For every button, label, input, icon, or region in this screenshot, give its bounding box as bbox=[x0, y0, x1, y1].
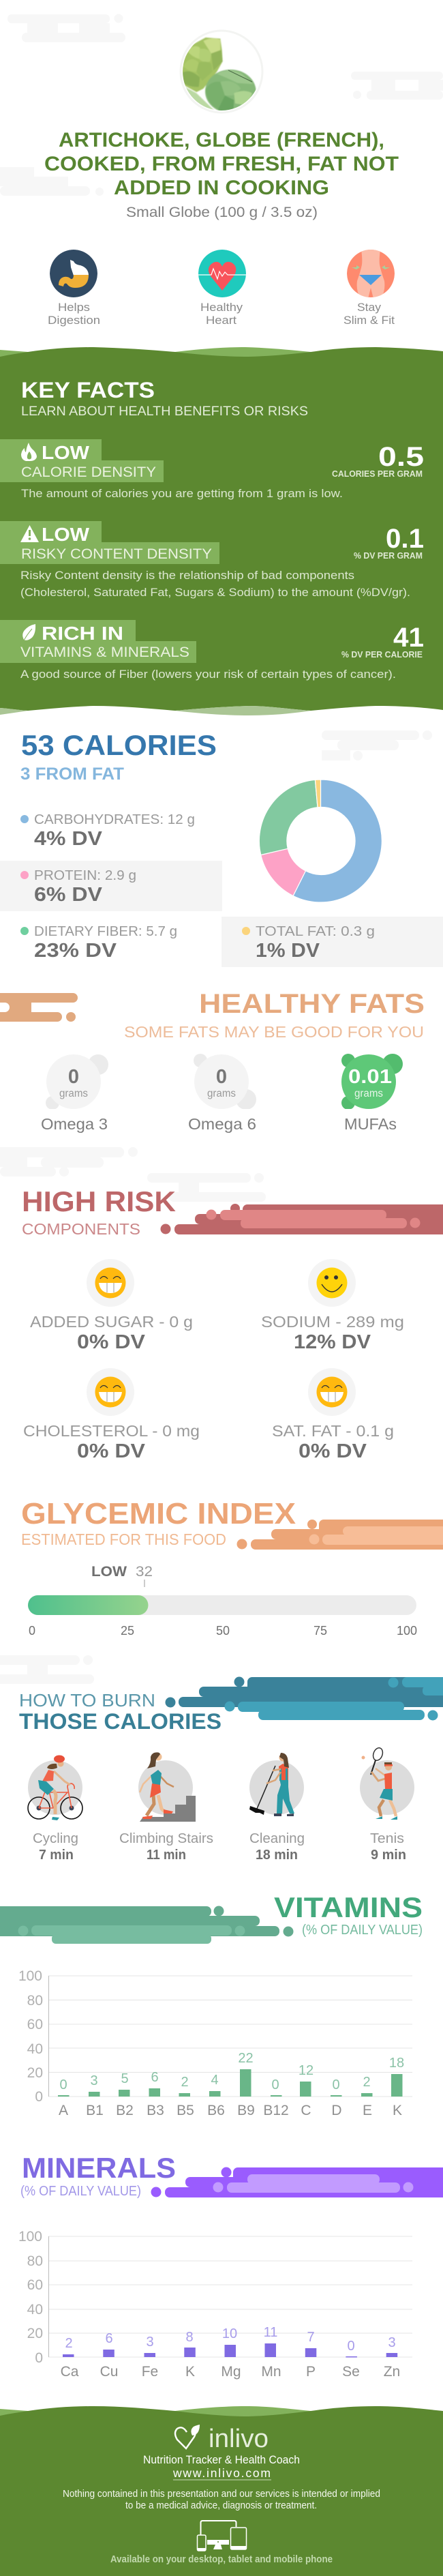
fact: rich in vitamins and minerals: 41 bbox=[393, 623, 424, 653]
component: sodium: 12% DV bbox=[294, 1331, 371, 1353]
icon: flame bbox=[21, 443, 37, 461]
bar chart: minerals: Fe bbox=[142, 2364, 158, 2380]
marker label: 32 bbox=[136, 1564, 153, 1580]
marker label bbox=[91, 1564, 153, 1587]
bar chart: minerals: 0 bbox=[347, 2339, 355, 2354]
fact: rich in vitamins and minerals: RICH IN bbox=[42, 623, 123, 644]
component: saturated fat: SAT. FAT - 0.1 g bbox=[272, 1422, 394, 1440]
bar chart: vitamins: 4 bbox=[211, 2073, 219, 2088]
title: COOKED, FROM FRESH, FAT NOT bbox=[44, 153, 399, 175]
benefit: helps digestion bbox=[48, 250, 100, 327]
availability note: Available on your desktop, tablet and mobile phone bbox=[110, 2554, 333, 2565]
fact: rich in vitamins and minerals: % DV PER CALORIE bbox=[341, 650, 423, 660]
fact: calorie density: LOW bbox=[42, 442, 90, 463]
bar chart: vitamins bbox=[18, 1968, 412, 2118]
website: www.inlivo.com bbox=[172, 2466, 271, 2480]
activity: cleaning: Cleaning bbox=[249, 1831, 305, 1846]
bar chart: vitamins: C bbox=[301, 2103, 311, 2118]
bar chart: vitamins: 0 bbox=[271, 2077, 279, 2092]
bar chart: minerals: 0 bbox=[35, 2350, 43, 2366]
fact: risky content density: LOW bbox=[42, 524, 90, 545]
activity: tennis: Tenis bbox=[370, 1831, 404, 1846]
omega 6: Omega 6 bbox=[188, 1115, 256, 1133]
marker label: LOW bbox=[91, 1564, 127, 1580]
heading: GLYCEMIC INDEX bbox=[21, 1497, 296, 1530]
fact: calorie density bbox=[0, 439, 424, 500]
donut chart bbox=[259, 780, 382, 902]
omega 3: grams bbox=[59, 1088, 88, 1099]
icon: tennis player bbox=[361, 1747, 397, 1820]
activity: cleaning: 18 min bbox=[256, 1848, 298, 1863]
omega 6: 0 bbox=[216, 1066, 227, 1088]
bar chart: minerals: Mg bbox=[221, 2364, 241, 2380]
subheading: (% OF DAILY VALUE) bbox=[20, 2184, 141, 2199]
icon: stair climber bbox=[140, 1752, 196, 1822]
component: sodium: SODIUM - 289 mg bbox=[261, 1313, 404, 1331]
bar chart: minerals: 20 bbox=[27, 2326, 43, 2341]
bar chart: minerals: 11 bbox=[264, 2325, 277, 2340]
gauge scale: 100 bbox=[397, 1624, 417, 1638]
icon: stomach bbox=[50, 250, 97, 297]
component: added sugar: 0% DV bbox=[77, 1331, 146, 1353]
food photo: artichoke bbox=[181, 31, 262, 113]
bar chart: vitamins: 6 bbox=[151, 2070, 159, 2085]
benefit: stay slim and fit: Stay bbox=[357, 301, 381, 314]
decorative band bbox=[0, 993, 78, 1022]
omega 3 bbox=[41, 1054, 108, 1133]
panel: vitamins bbox=[0, 1891, 423, 2118]
tagline: Nutrition Tracker & Health Coach bbox=[143, 2454, 300, 2466]
icon: grin face bbox=[316, 1376, 348, 1408]
subheading: 3 FROM FAT bbox=[20, 765, 124, 784]
fact: risky content density: % DV PER GRAM bbox=[354, 551, 423, 561]
fact: calorie density: The amount of calories you are getting from 1 gram is low. bbox=[21, 488, 343, 500]
bar chart: vitamins: 22 bbox=[238, 2051, 254, 2066]
bar chart: minerals: 80 bbox=[27, 2253, 43, 2269]
background clouds, header bbox=[0, 14, 443, 196]
component: saturated fat bbox=[272, 1368, 394, 1462]
footer bbox=[0, 2406, 443, 2576]
panel: key facts bbox=[0, 347, 443, 715]
heading: KEY FACTS bbox=[21, 378, 155, 402]
omega 6: grams bbox=[207, 1088, 236, 1099]
panel: glycemic index bbox=[21, 1497, 443, 1638]
bar chart: minerals: Mn bbox=[261, 2364, 281, 2380]
bar chart: minerals: 3 bbox=[146, 2335, 154, 2350]
title bbox=[44, 129, 399, 199]
heading: MINERALS bbox=[22, 2152, 176, 2184]
bar chart: vitamins: 60 bbox=[27, 2017, 43, 2032]
legend: protein: PROTEIN: 2.9 g bbox=[34, 868, 136, 883]
icon: warning bbox=[20, 525, 39, 542]
omega 3: 0 bbox=[68, 1066, 79, 1088]
activity: tennis bbox=[360, 1747, 414, 1863]
fact: rich in vitamins and minerals: A good source of Fiber (lowers your risk of certain types of cancer). bbox=[20, 668, 396, 681]
bar chart: vitamins: A bbox=[59, 2103, 68, 2118]
background cloud, burn bbox=[0, 1655, 94, 1684]
background clouds, high risk bbox=[0, 1147, 266, 1202]
bar chart: vitamins: B3 bbox=[147, 2103, 164, 2118]
fact: calorie density: 0.5 bbox=[378, 442, 424, 472]
bar chart: minerals: 3 bbox=[388, 2335, 396, 2350]
activity: cycling: 7 min bbox=[39, 1848, 74, 1863]
bar chart: minerals: Cu bbox=[100, 2364, 118, 2380]
logo: wordmark: inlivo bbox=[209, 2425, 269, 2453]
fact: calorie density: CALORIES PER GRAM bbox=[332, 469, 423, 479]
icon: smile face bbox=[316, 1267, 348, 1299]
panel: high risk bbox=[22, 1185, 443, 1462]
benefit: helps digestion: Helps bbox=[58, 301, 90, 314]
component: sodium bbox=[261, 1259, 404, 1353]
bar chart: vitamins: B2 bbox=[116, 2103, 134, 2118]
omega 3: Omega 3 bbox=[41, 1115, 108, 1133]
activity: cycling: Cycling bbox=[33, 1831, 78, 1846]
activity: cleaning bbox=[249, 1753, 305, 1863]
icon: waist bbox=[347, 250, 395, 299]
benefit: stay slim and fit: Slim & Fit bbox=[343, 314, 395, 327]
panel: calories bbox=[0, 729, 443, 967]
bar chart: vitamins: 2 bbox=[181, 2075, 189, 2090]
activity: cycling bbox=[28, 1756, 82, 1863]
disclaimer bbox=[63, 2488, 380, 2511]
legend: dietary fiber: 23% DV bbox=[34, 940, 117, 962]
panel: how to burn: THOSE CALORIES bbox=[19, 1709, 222, 1734]
bar chart: vitamins: 0 bbox=[332, 2077, 340, 2092]
subheading: SOME FATS MAY BE GOOD FOR YOU bbox=[124, 1023, 424, 1041]
bar chart: minerals: 8 bbox=[185, 2330, 194, 2345]
gauge scale bbox=[29, 1624, 417, 1638]
decorative band bbox=[0, 1906, 293, 1944]
bar chart: minerals: 2 bbox=[65, 2336, 73, 2351]
decorative band bbox=[161, 1204, 443, 1234]
fact: risky content density: Risky Content density is the relationship of bad components bbox=[20, 569, 354, 582]
bar chart: minerals: 100 bbox=[18, 2229, 42, 2245]
bar chart: vitamins: D bbox=[331, 2103, 342, 2118]
icon: heart bbox=[198, 250, 246, 297]
panel: minerals bbox=[18, 2152, 443, 2380]
component: saturated fat: 0% DV bbox=[299, 1440, 367, 1462]
heading: HIGH RISK bbox=[22, 1185, 176, 1217]
bar chart: vitamins: B9 bbox=[237, 2103, 255, 2118]
bar chart: minerals: Zn bbox=[384, 2364, 400, 2380]
component: cholesterol: CHOLESTEROL - 0 mg bbox=[23, 1422, 200, 1440]
logo: heart and leaf bbox=[175, 2425, 200, 2448]
benefit: healthy heart bbox=[198, 250, 246, 327]
icon: leaf bbox=[22, 624, 35, 640]
legend: carbohydrates: 4% DV bbox=[34, 828, 103, 850]
gauge scale: 25 bbox=[121, 1624, 134, 1638]
decorative band bbox=[237, 1520, 443, 1550]
legend: dietary fiber: DIETARY FIBER: 5.7 g bbox=[34, 923, 177, 939]
bar chart: vitamins: 0 bbox=[35, 2089, 43, 2105]
icon: cyclist bbox=[28, 1756, 82, 1820]
subheading: LEARN ABOUT HEALTH BENEFITS OR RISKS bbox=[21, 404, 308, 419]
bar chart: minerals bbox=[18, 2229, 412, 2380]
subheading: COMPONENTS bbox=[22, 1220, 140, 1238]
panel: healthy fats bbox=[0, 989, 425, 1133]
bar chart: minerals: K bbox=[185, 2364, 195, 2380]
component: added sugar bbox=[30, 1259, 193, 1353]
fact: calorie density: CALORIE DENSITY bbox=[21, 464, 156, 480]
gauge scale: 75 bbox=[314, 1624, 327, 1638]
heading: HOW TO BURN bbox=[19, 1690, 155, 1711]
activity: tennis: 9 min bbox=[371, 1848, 406, 1863]
icon: devices bbox=[197, 2521, 247, 2551]
legend: protein bbox=[0, 861, 222, 911]
legend: carbohydrates: CARBOHYDRATES: 12 g bbox=[34, 812, 195, 827]
subheading: (% OF DAILY VALUE) bbox=[302, 1923, 423, 1938]
fact: risky content density: 0.1 bbox=[386, 524, 424, 554]
bar chart: vitamins: 40 bbox=[27, 2041, 43, 2057]
gauge scale: 50 bbox=[216, 1624, 230, 1638]
component: added sugar: ADDED SUGAR - 0 g bbox=[30, 1313, 193, 1331]
icon: grin face bbox=[95, 1267, 125, 1299]
fact: rich in vitamins and minerals: VITAMINS & MINERALS bbox=[20, 645, 189, 660]
icon: grin face bbox=[95, 1376, 125, 1408]
bar chart: vitamins: 80 bbox=[27, 1993, 43, 2009]
subheading: ESTIMATED FOR THIS FOOD bbox=[21, 1530, 226, 1548]
benefit: stay slim and fit bbox=[343, 250, 395, 327]
bar chart: minerals: Se bbox=[342, 2364, 360, 2380]
mufas: grams bbox=[354, 1088, 383, 1099]
bar chart: minerals: 10 bbox=[222, 2326, 237, 2341]
bar chart: vitamins: B5 bbox=[177, 2103, 194, 2118]
legend: total fat: TOTAL FAT: 0.3 g bbox=[256, 923, 375, 939]
component: cholesterol: 0% DV bbox=[77, 1440, 146, 1462]
bar chart: vitamins: 20 bbox=[27, 2065, 43, 2081]
gauge bar bbox=[28, 1595, 416, 1615]
legend: carbohydrates bbox=[20, 812, 195, 850]
serving size: Small Globe (100 g / 3.5 oz) bbox=[126, 205, 318, 220]
bar chart: vitamins: B6 bbox=[207, 2103, 225, 2118]
mufas: MUFAs bbox=[344, 1115, 397, 1133]
legend: dietary fiber bbox=[20, 923, 177, 962]
title: ARTICHOKE, GLOBE (FRENCH), bbox=[59, 129, 384, 151]
benefit: helps digestion: Digestion bbox=[48, 314, 100, 327]
heading: 53 CALORIES bbox=[21, 729, 217, 761]
fact: risky content density: RISKY CONTENT DENSITY bbox=[21, 546, 212, 562]
bar chart: vitamins: 5 bbox=[121, 2071, 129, 2086]
bar chart: vitamins: 2 bbox=[363, 2075, 371, 2090]
mufas bbox=[341, 1054, 403, 1133]
omega 6 bbox=[188, 1054, 256, 1133]
legend: total fat bbox=[222, 917, 443, 967]
bar chart: vitamins: B12 bbox=[263, 2103, 289, 2118]
bar chart: vitamins: K bbox=[393, 2103, 402, 2118]
decorative band bbox=[165, 1676, 443, 1720]
heading: VITAMINS bbox=[274, 1891, 423, 1923]
title: ADDED IN COOKING bbox=[114, 177, 329, 199]
bar chart: vitamins: B1 bbox=[86, 2103, 104, 2118]
fact: risky content density: (Cholesterol, Saturated Fat, Sugars & Sodium) to the amount (%DV/gr). bbox=[20, 587, 410, 599]
benefit: healthy heart: Heart bbox=[206, 314, 236, 327]
heading: HEALTHY FATS bbox=[199, 989, 425, 1019]
fact: risky content density bbox=[0, 521, 424, 599]
benefit: healthy heart: Healthy bbox=[200, 301, 243, 314]
bar chart: minerals: 6 bbox=[105, 2331, 113, 2346]
bar chart: vitamins: 12 bbox=[299, 2063, 314, 2078]
bar chart: vitamins: 18 bbox=[389, 2056, 404, 2071]
bar chart: minerals: 40 bbox=[27, 2302, 43, 2318]
panel: how to burn bbox=[19, 1676, 443, 1863]
legend: total fat: 1% DV bbox=[256, 940, 320, 962]
fact: rich in vitamins and minerals bbox=[0, 620, 424, 681]
decorative band bbox=[151, 2167, 443, 2197]
bar chart: minerals: P bbox=[306, 2364, 316, 2380]
disclaimer: to be a medical advice, diagnosis or treatment. bbox=[125, 2500, 317, 2511]
gauge scale: 0 bbox=[29, 1624, 35, 1638]
bar chart: minerals: 60 bbox=[27, 2277, 43, 2293]
bar chart: minerals: 7 bbox=[307, 2330, 315, 2345]
component: cholesterol bbox=[23, 1368, 200, 1462]
legend: protein: 6% DV bbox=[34, 884, 103, 906]
icon: person sweeping bbox=[249, 1753, 294, 1816]
bar chart: minerals: Ca bbox=[61, 2364, 79, 2380]
activity: climbing stairs: 11 min bbox=[147, 1848, 186, 1863]
disclaimer: Nothing contained in this presentation and our services is intended or implied bbox=[63, 2488, 380, 2500]
bar chart: vitamins: 0 bbox=[59, 2077, 67, 2092]
bar chart: vitamins: E bbox=[363, 2103, 372, 2118]
activity: climbing stairs: Climbing Stairs bbox=[119, 1831, 213, 1846]
bar chart: vitamins: 100 bbox=[18, 1968, 42, 1984]
activity: climbing stairs bbox=[119, 1752, 213, 1863]
bar chart: vitamins: 3 bbox=[90, 2073, 98, 2088]
mufas: 0.01 bbox=[348, 1066, 392, 1088]
